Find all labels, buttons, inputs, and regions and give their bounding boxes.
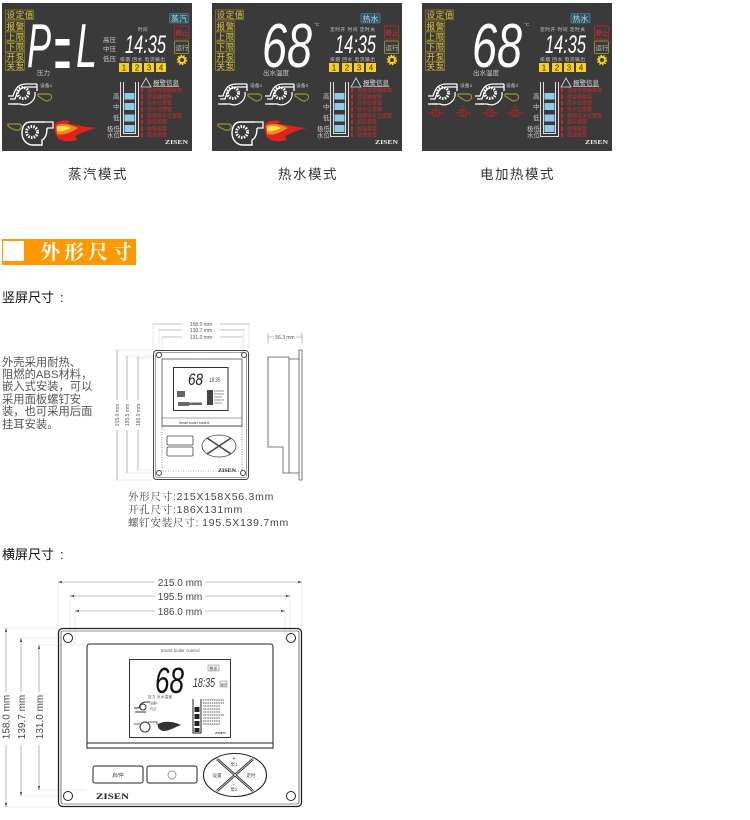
output labels: 排烟 回水 电流输出 [330,56,375,63]
temperature readout: 68 [472,12,522,81]
pressure levels: 低压 [103,54,116,63]
device labels: 设备1 [250,82,263,89]
output labels: 排烟 回水 电流输出 [120,56,165,63]
dimension lines: 139.7 mm [17,695,28,739]
output indicators: 3 [567,64,572,72]
water level labels: 中 [323,102,330,111]
heading: vertical screen size: 竖屏尺寸 : [2,290,64,305]
alarm list: 温度传感器故障 [357,87,392,94]
status labels column: 下限 [426,42,445,52]
LCD screen [130,660,230,738]
LCD screen: 68 [188,370,203,389]
alarm heading: 报警信息 [363,78,390,87]
product caption: Smart boiler control [179,421,210,425]
status badge: stopped [384,26,399,39]
output indicators: 2 [135,64,140,72]
large readout P=L: P [27,12,51,81]
pressure levels [103,35,116,63]
status labels column [216,10,244,72]
specs text [128,490,289,529]
mode label: 热水 [210,665,218,671]
dimension lines: 215.0 mm [115,404,121,426]
time label: 时间 [138,26,148,33]
alarm list: 燃烧器故障 [147,93,172,100]
control pad: − [233,782,236,788]
icon: alarm triangle [561,78,571,87]
control pad: 泵1 [230,762,238,767]
dimension lines [2,578,302,807]
alarm list: 低水位报警 [357,106,382,113]
mode badge: hot water: 热水 [362,14,378,24]
caption: hot water mode: 热水模式 [278,167,338,182]
device labels [460,82,519,89]
caption: steam mode: 蒸汽模式 [68,167,128,182]
water level labels: 高 [113,92,120,100]
logo: ZISEN [585,140,609,146]
alarm list: 故障报警 [147,125,167,132]
dimension lines: 139.7 mm [190,328,212,334]
alarm list: 超压报警 [147,119,167,126]
description text: 采用面板螺钉安 [2,392,81,406]
outlet temperature label: 出水温度 [473,68,500,77]
logo: ZISEN [165,140,189,146]
time readout: 14:35 [335,31,376,59]
status labels column: 关泵 [216,62,235,72]
status badge: running: 运行 [176,43,189,52]
water level labels: 高 [533,92,540,100]
alarm list [203,700,224,724]
status badge: running [384,41,399,54]
status labels column: 开泵 [6,52,25,62]
water level labels: 低 [113,113,120,122]
time labels: 定时开 时间 定时关 [330,26,375,33]
time readout: 14:35 [125,31,166,59]
dimension lines [115,322,249,480]
alarm heading: 报警信息 [573,78,600,87]
output indicators [119,63,166,72]
status badge: running [594,41,609,54]
pressure label: 压力 出水温度 [148,694,172,699]
status labels column: 报警 [426,22,445,32]
description text [2,355,92,431]
dimension lines: 131.0 mm [35,695,46,739]
heading: outline dimensions [2,239,136,265]
diagram: vertical unit front view [115,322,249,480]
status labels column: 报警 [216,22,235,32]
electric heaters: 3 [489,105,492,111]
water level labels: 极低 [527,124,540,133]
description text: 装，也可采用后面 [2,405,92,418]
mode badge: hot water: 热水 [572,14,588,24]
alarm list: 低水位报警 [147,106,172,113]
caption: electric heating mode: 电加热模式 [480,167,555,182]
water level labels [317,92,330,140]
alarm list: 极限低水位报警 [567,112,602,119]
buttons [167,435,236,457]
alarm list: 超温报警 [147,132,167,139]
water level labels: 水位 [107,130,120,140]
water level labels: 水位 [317,130,330,140]
alarm list: 低水位报警 [567,106,592,113]
large readout P=L: = [54,3,71,103]
diagram: vertical unit side view [268,333,302,480]
water level labels: 极低 [317,124,330,133]
status badge: running [174,41,189,54]
heading: horizontal screen size: 横屏尺寸 : [2,547,64,562]
control pad: 泵2 [230,787,238,792]
description text: 外壳采用耐热、 [2,355,81,369]
LCD screen [174,368,228,410]
device labels [250,82,309,89]
output indicators: 2 [555,64,560,72]
status labels column: 开泵 [426,52,445,62]
output indicators: 4 [159,64,164,72]
water level labels: 中 [113,102,120,111]
logo: ZISEN [96,791,130,801]
icon: gear [388,56,396,64]
status labels column: 设定值 [6,10,34,20]
status labels column: 下限 [216,42,235,52]
diagram: vertical unit side view: 56.3 mm [275,335,295,341]
pressure levels: 中压 [103,44,116,53]
dimension lines: 158.0 mm [2,695,12,739]
dimension lines: 195.5 mm [125,404,131,426]
logo: ZISEN [218,469,236,474]
panel: electric heating mode display [422,3,612,151]
alarm list: 极限低水位报警 [147,112,182,119]
water level labels: 低 [533,113,540,122]
alarm list [351,87,392,139]
water level labels: 高 [323,92,330,100]
water level labels: 中 [533,102,540,111]
water level tank [540,82,558,136]
water level tank [120,82,138,136]
status labels column: 下限 [6,42,25,52]
status labels column: 上限 [216,32,235,42]
outlet temperature label: 出水温度 [263,68,290,77]
panel: hot water mode display [212,3,402,151]
water level labels: 低 [323,113,330,122]
status labels column [6,10,34,72]
icon: flame [55,120,97,141]
status badge: running: 运行 [596,43,609,52]
device labels: 设备1 [460,82,473,89]
icon: burner fan [218,122,263,145]
output indicators [329,63,376,72]
status labels column [426,10,454,72]
water level labels: 水位 [527,130,540,140]
housing [58,628,302,806]
icon: alarm triangle [141,78,151,87]
device labels: 设备2 [506,82,519,89]
water level labels [527,92,540,140]
large readout P=L: L [76,12,97,81]
status labels column: 开泵 [216,52,235,62]
output indicators: 1 [542,64,547,72]
alarm list [141,87,182,139]
water level tank [330,82,348,136]
description text: 阻燃的ABS材料， [2,367,92,381]
status badge: running: 运行 [386,43,399,52]
dimension lines: 131.0 mm [190,335,212,341]
icon: device fans and hands [428,84,519,105]
alarm list: 超温报警 [567,132,587,139]
start stop button: 启/停 [112,772,124,779]
icon: device 1 fan [8,84,37,105]
status labels column: 设定值 [216,10,244,20]
output indicators: 1 [332,64,337,72]
start stop button [93,766,143,783]
water level labels [107,92,120,140]
device fan: 设备1 [150,700,158,705]
device labels: 设备2 [296,82,309,89]
control pad: + [233,756,236,762]
output indicators: 4 [369,64,374,72]
dimension lines: 195.5 mm [158,592,202,603]
diagram: horizontal unit front view [2,578,302,807]
description text: 嵌入式安装，可以 [2,379,92,393]
large readout P=L [27,3,97,103]
temperature readout: 68 [262,12,312,81]
device 1 label: 设备1 [40,82,53,89]
power button [147,766,197,783]
status badge: stopped [174,26,189,39]
dimension lines: 186.0 mm [136,404,142,426]
status labels column: 关泵 [6,62,25,72]
status badge: stopped [594,26,609,39]
LCD screen: 18:35 [209,378,220,384]
output indicators [539,63,586,72]
electric heaters: 1 [435,105,438,111]
logo: ZISEN [375,140,399,146]
running label: 运行 [220,682,228,687]
dimension lines: 158.0 mm [190,322,212,328]
electric heaters: 4 [514,105,517,111]
icon: flame [265,120,307,141]
electric heaters: 2 [462,105,465,111]
specs text: 外形尺寸:215X158X56.3mm [128,490,274,503]
alarm list: 温度传感器故障 [147,87,182,94]
status labels column: 上限 [426,32,445,42]
electric heaters [428,105,523,116]
alarm list: 超压报警 [357,119,377,126]
alarm list: 高水位报警 [567,100,592,107]
specs text: 开孔尺寸:186X131mm [128,503,243,516]
alarm list [561,87,602,139]
specs text: 螺钉安装尺寸: 195.5X139.7mm [128,516,289,529]
output indicators: 3 [147,64,152,72]
icon: hand [38,94,52,101]
burner and flame [134,722,181,732]
status labels column: 上限 [6,32,25,42]
control pad: 定时 [246,772,256,779]
status badge: stopped: 静止 [386,28,399,37]
temperature readout: 68 [155,660,184,701]
alarm heading: 报警信息 [153,78,180,87]
time readout: 18:35 [193,675,216,690]
status labels column: 设定值 [426,10,454,20]
icon: alarm triangle [351,78,361,87]
panel: steam mode display [2,3,192,151]
alarm list: 极限低水位报警 [357,112,392,119]
status labels column: 关泵 [426,62,445,72]
logo: ZISEN [215,731,226,735]
icon: device fans and hands [218,84,309,105]
output indicators: 3 [357,64,362,72]
dimension lines: 215.0 mm [158,578,202,589]
icon: gear [178,56,186,64]
degree unit: °C [314,22,320,28]
status labels column: 报警 [6,22,25,32]
icon: burner fan [8,122,53,145]
water tank [193,699,201,733]
control pad: 设置 [212,772,222,779]
mode badge: steam: 蒸汽 [171,14,187,24]
output indicators: 2 [345,64,350,72]
alarm list: 温度传感器故障 [567,87,602,94]
alarm list: 故障报警 [567,125,587,132]
housing [154,350,248,480]
time labels: 定时开 时间 定时关 [540,26,585,33]
alarm list: 燃烧器故障 [567,93,592,100]
alarm list: 超温报警 [357,132,377,139]
product caption: Smart boiler control [160,648,200,653]
water level labels: 极低 [107,124,120,133]
icon: gear [598,56,606,64]
time readout: 14:35 [545,31,586,59]
description text: 挂耳安装。 [2,417,58,431]
status badge: stopped: 静止 [596,28,609,37]
alarm list: 燃烧器故障 [357,93,382,100]
dimension lines: 186.0 mm [158,607,202,618]
alarm list: 高水位报警 [147,100,172,107]
alarm list: 高水位报警 [357,100,382,107]
output indicators: 1 [122,64,127,72]
status badge: stopped: 静止 [176,28,189,37]
degree unit: °C [524,22,530,28]
control pad [204,754,266,796]
pressure label: 压力 [37,68,50,77]
alarm list: 故障报警 [357,125,377,132]
heading: outline dimensions: 外形尺寸 [40,241,136,264]
output labels: 排烟 回水 电流输出 [540,56,585,63]
alarm list: 超压报警 [567,119,587,126]
output indicators: 4 [579,64,584,72]
pressure levels: 高压 [103,35,116,44]
